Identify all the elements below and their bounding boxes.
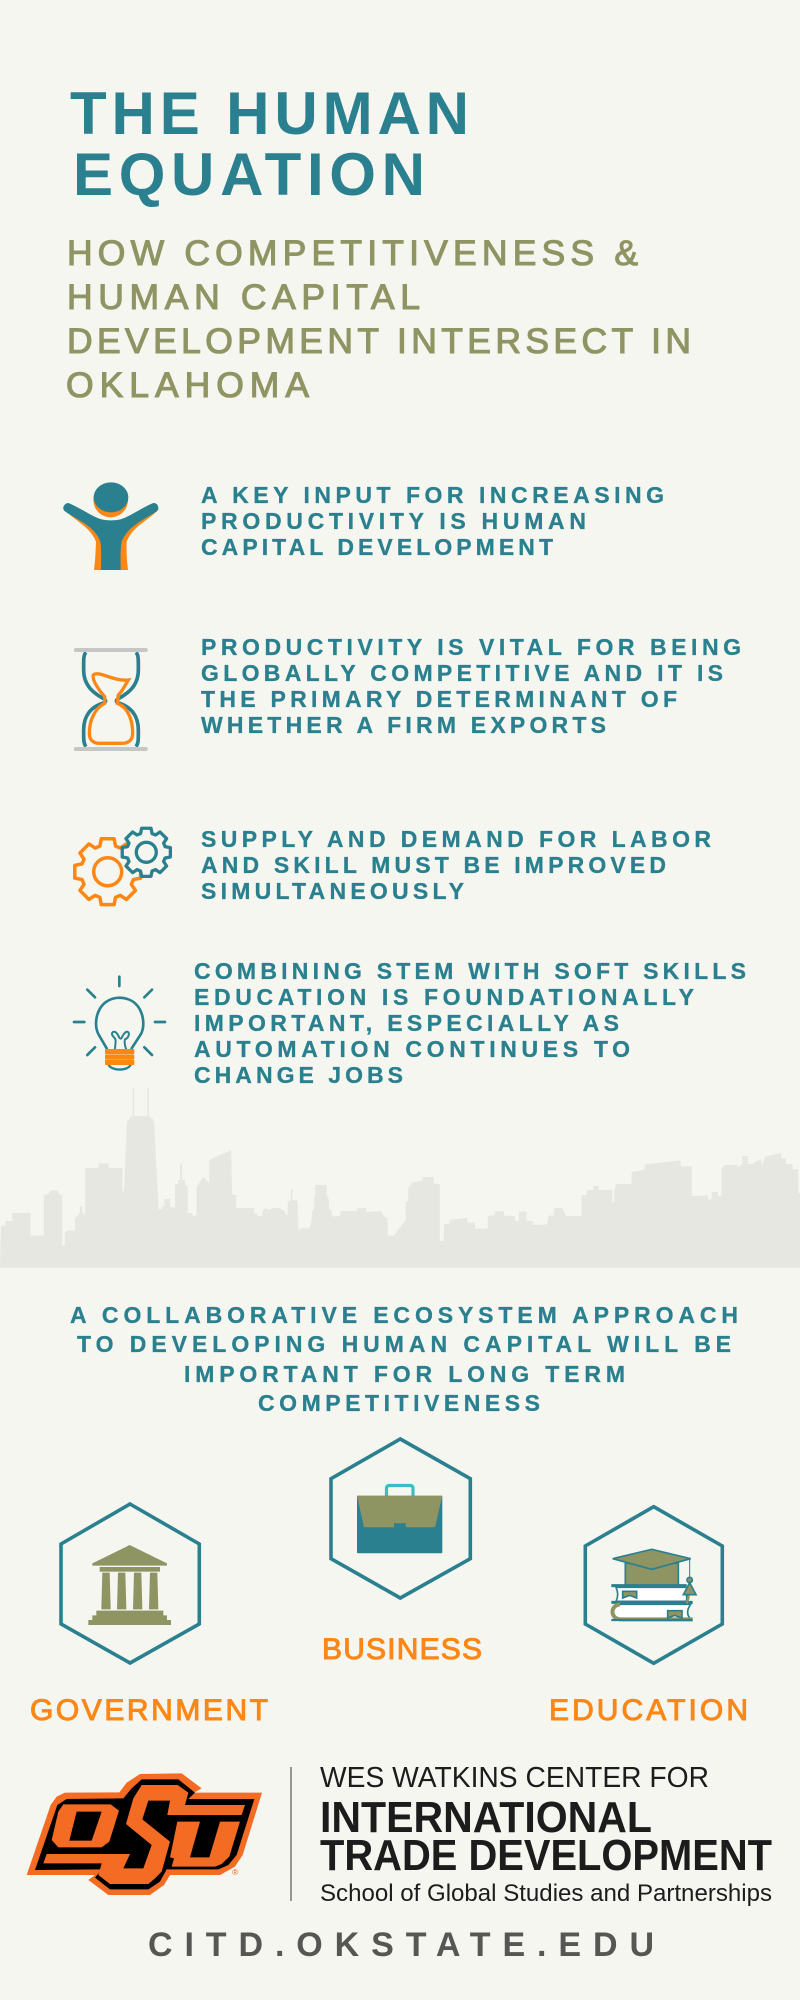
heading: collaborative ecosystem [70, 1302, 738, 1416]
text: STEM and soft skills [194, 958, 746, 1088]
icon: briefcase [357, 1486, 442, 1553]
icon: graduation cap on books [611, 1549, 696, 1620]
subtitle: OKLAHOMA [66, 365, 309, 405]
text: supply and demand: SIMULTANEOUSLY [201, 878, 464, 904]
text: productivity and exports: THE PRIMARY DETERMINANT OF [201, 686, 677, 712]
icon: person with raised arms [63, 482, 159, 570]
panel: business: BUSINESS [322, 1633, 482, 1666]
icon: hourglass [74, 648, 148, 751]
text: STEM and soft skills: EDUCATION IS FOUNDATIONALLY [194, 984, 694, 1010]
title: EQUATION [73, 141, 425, 208]
title: THE HUMAN [70, 80, 469, 147]
website url: CITD.OKSTATE.EDU [148, 1926, 654, 1964]
logo: OSU: ® [232, 1867, 239, 1877]
heading: collaborative ecosystem: COMPETITIVENESS [258, 1390, 540, 1416]
text: supply and demand [201, 826, 711, 904]
subtitle [66, 233, 691, 405]
title [70, 80, 469, 208]
skyline silhouette [0, 1087, 800, 1268]
icon: government building [88, 1545, 171, 1625]
panel: education [549, 1507, 748, 1727]
text: STEM and soft skills: IMPORTANT, ESPECIALLY AS [194, 1010, 619, 1036]
logo text: Wes Watkins Center: WES WATKINS CENTER FOR [320, 1762, 709, 1794]
text: human capital development: A KEY INPUT FOR INCREASING [201, 482, 664, 508]
logo text: Wes Watkins Center: TRADE DEVELOPMENT [320, 1832, 772, 1880]
subtitle: HUMAN CAPITAL [67, 277, 420, 317]
panel: education: EDUCATION [549, 1694, 748, 1727]
panel: government [30, 1504, 268, 1727]
heading: collaborative ecosystem: A COLLABORATIVE ECOSYSTEM APPROACH [70, 1302, 738, 1328]
text: supply and demand: AND SKILL MUST BE IMPROVED [201, 852, 666, 878]
text: productivity and exports: WHETHER A FIRM EXPORTS [201, 712, 606, 738]
text: STEM and soft skills: CHANGE JOBS [194, 1062, 403, 1088]
heading: collaborative ecosystem: IMPORTANT FOR LONG TERM [184, 1361, 625, 1387]
panel: business [322, 1439, 482, 1666]
icon: gears [75, 828, 170, 905]
icon: light bulb [74, 977, 165, 1070]
text: STEM and soft skills: COMBINING STEM WITH SOFT SKILLS [194, 958, 746, 984]
text: STEM and soft skills: AUTOMATION CONTINUES TO [194, 1036, 630, 1062]
divider [290, 1767, 292, 1901]
text: human capital development: PRODUCTIVITY IS HUMAN [201, 508, 586, 534]
logo text: Wes Watkins Center: School of Global Studies and Partnerships [320, 1880, 772, 1907]
logo text: Wes Watkins Center [320, 1762, 772, 1907]
text: human capital development [201, 482, 664, 560]
text: supply and demand: SUPPLY AND DEMAND FOR LABOR [201, 826, 711, 852]
subtitle: HOW COMPETITIVENESS & [67, 233, 638, 273]
text: productivity and exports [201, 634, 741, 738]
subtitle: DEVELOPMENT INTERSECT IN [67, 321, 691, 361]
text: human capital development: CAPITAL DEVELOPMENT [201, 534, 553, 560]
logo: OSU [27, 1773, 262, 1895]
panel: government: GOVERNMENT [30, 1694, 268, 1727]
text: productivity and exports: GLOBALLY COMPETITIVE AND IT IS [201, 660, 723, 686]
text: productivity and exports: PRODUCTIVITY IS VITAL FOR BEING [201, 634, 741, 660]
logo text: Wes Watkins Center: INTERNATIONAL [320, 1794, 652, 1842]
heading: collaborative ecosystem: TO DEVELOPING HUMAN CAPITAL WILL BE [77, 1331, 731, 1357]
